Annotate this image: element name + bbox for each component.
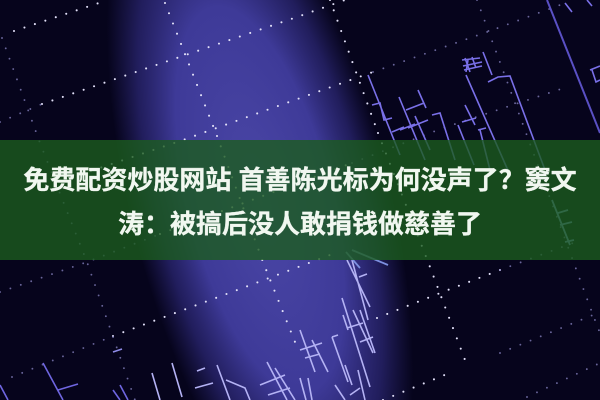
band-level chart lines on the right	[346, 200, 574, 268]
green title band	[0, 140, 600, 260]
candlestick chart lines	[368, 0, 600, 175]
candlestick chart lines in the lower part	[0, 260, 375, 400]
title	[23, 165, 577, 239]
title: 免费配资炒股网站 首善陈光标为何没声了？窦文	[23, 165, 577, 195]
title: 涛：被搞后没人敢捐钱做慈善了	[118, 209, 482, 239]
